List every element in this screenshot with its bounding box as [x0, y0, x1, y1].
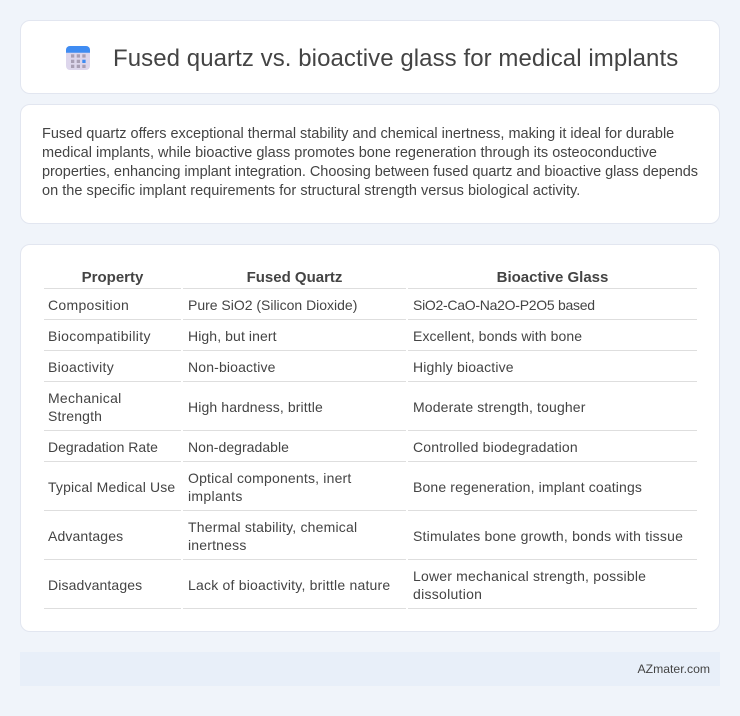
comparison table: Lower mechanical strength, possible — [413, 568, 646, 584]
comparison table: Non-degradable — [188, 439, 289, 455]
row: Mechanical Strength: Strength — [48, 408, 102, 424]
row: Mechanical Strength — [48, 390, 122, 424]
comparison table: implants — [188, 488, 243, 504]
panel: title card — [20, 20, 720, 94]
footer bar — [20, 652, 720, 686]
comparison table: Controlled biodegradation — [413, 439, 578, 455]
comparison table: Non-bioactive — [188, 359, 276, 375]
comparison table: SiO2-CaO-Na2O-P2O5 based — [413, 297, 595, 313]
comparison table: High hardness, brittle — [188, 399, 323, 415]
table header: Bioactive Glass: Bioactive Glass — [497, 269, 608, 286]
title: Fused quartz vs. bioactive glass for medical implants — [113, 45, 678, 72]
table header: Property: Property — [82, 269, 143, 286]
summary text: Fused quartz offers exceptional thermal stability and chemical inertness, making it ideal for durable — [42, 126, 674, 142]
row: Advantages: Advantages — [48, 528, 123, 544]
comparison table: Lack of bioactivity, brittle nature — [188, 577, 390, 593]
row: Biocompatibility: Biocompatibility — [48, 328, 151, 344]
summary text: medical implants, while bioactive glass promotes bone regeneration through its osteoconductive — [42, 145, 657, 161]
panel: comparison table card — [20, 244, 720, 632]
summary text — [42, 126, 698, 199]
comparison table: Optical components, inert — [188, 470, 352, 486]
comparison table: Thermal stability, chemical — [188, 519, 357, 535]
comparison table: High, but inert — [188, 328, 277, 344]
comparison table: Highly bioactive — [413, 359, 514, 375]
table header: Fused Quartz: Fused Quartz — [247, 269, 342, 286]
comparison table: Moderate strength, tougher — [413, 399, 586, 415]
row: Composition: Composition — [48, 297, 129, 313]
comparison table: Excellent, bonds with bone — [413, 328, 582, 344]
row: Disadvantages: Disadvantages — [48, 577, 142, 593]
comparison table — [44, 269, 697, 609]
summary text: on the specific implant requirements for structural strength versus biological activity. — [42, 183, 580, 199]
row: Degradation Rate: Degradation Rate — [48, 439, 158, 455]
comparison table: Bone regeneration, implant coatings — [413, 479, 642, 495]
comparison table: Stimulates bone growth, bonds with tissue — [413, 528, 683, 544]
row: Mechanical Strength: Mechanical — [48, 390, 122, 406]
comparison table: Pure SiO2 (Silicon Dioxide) — [188, 297, 357, 313]
icon: calendar grid — [66, 46, 90, 70]
summary text: properties, enhancing implant integration. Choosing between fused quartz and bioactive glass depends — [42, 164, 698, 180]
row: Typical Medical Use: Typical Medical Use — [48, 479, 175, 495]
panel: summary card — [20, 104, 720, 224]
row: Bioactivity: Bioactivity — [48, 359, 114, 375]
comparison table: inertness — [188, 537, 247, 553]
comparison table: dissolution — [413, 586, 482, 602]
footer credit: AZmater.com — [638, 662, 710, 676]
